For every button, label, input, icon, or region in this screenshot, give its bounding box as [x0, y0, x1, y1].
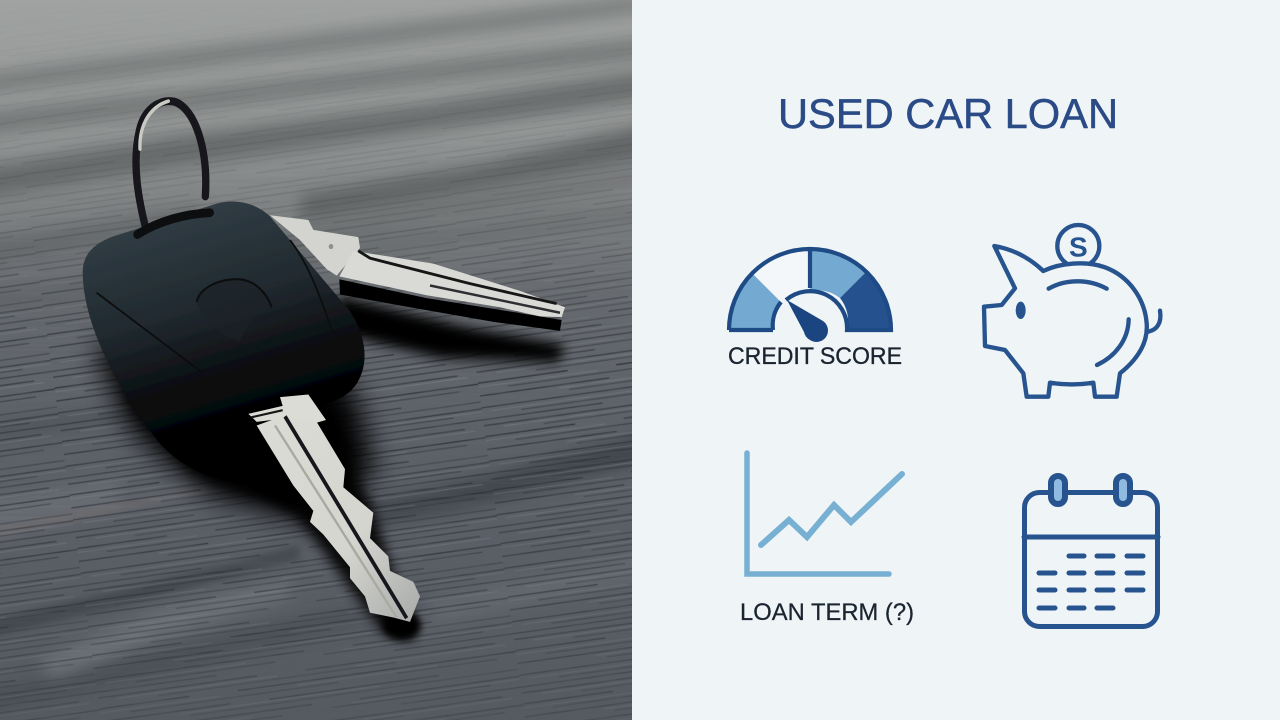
- icon: calendar: [1024, 476, 1158, 626]
- key shadows: [95, 295, 565, 640]
- coin: [1057, 225, 1099, 267]
- fob body: [83, 202, 365, 484]
- pig back curve: [1049, 281, 1107, 289]
- icon: key ring: [136, 101, 206, 235]
- icon: black key fob: [83, 202, 365, 484]
- icon: piggy bank with coin: [984, 225, 1160, 397]
- chart trend line: [761, 474, 902, 545]
- label: loan term: LOAN TERM (?): [740, 599, 914, 626]
- gauge left light-blue segment: [729, 273, 781, 330]
- wood grain lines: [0, 90, 632, 720]
- calendar frame: [1024, 492, 1158, 626]
- icon: lower fob key: [248, 395, 420, 622]
- pig belly curve: [1097, 319, 1129, 365]
- calendar left binding ring: [1051, 476, 1065, 504]
- label: credit score: CREDIT SCORE: [728, 343, 902, 370]
- fob button: [197, 279, 272, 342]
- calendar right binding ring: [1116, 476, 1130, 504]
- calendar header line: [1024, 534, 1158, 540]
- calendar date dashes: [1039, 556, 1143, 608]
- blade grooves: [358, 251, 557, 304]
- coin dollar sign: S: [1069, 232, 1088, 263]
- icon: upper house key: [270, 215, 565, 331]
- key head hole: [329, 244, 333, 249]
- blade groove: [285, 416, 407, 618]
- title: USED CAR LOAN: [778, 90, 1118, 137]
- panel: right background: [632, 0, 1280, 720]
- key head: [270, 215, 360, 276]
- fob seam: [97, 293, 200, 371]
- gauge needle: [787, 300, 828, 342]
- icon: line chart: [747, 453, 902, 574]
- gauge mid-blue segment: [810, 249, 866, 298]
- blurred wood streaks: [0, 0, 632, 720]
- gauge dark-blue segment: [840, 272, 891, 330]
- icon: credit score gauge: [729, 249, 891, 342]
- chart axes: [747, 453, 889, 574]
- pig tail: [1148, 311, 1160, 332]
- panel: photo of car keys on wooden table: [0, 0, 632, 720]
- wood table surface: [0, 0, 632, 720]
- pig eye: [1016, 302, 1026, 319]
- key blade: [339, 251, 565, 317]
- ring slot: [137, 213, 210, 235]
- gauge outline: [729, 249, 891, 330]
- gauge white segment: [752, 249, 810, 302]
- key shoulder: [248, 395, 326, 423]
- pig body: [984, 246, 1147, 397]
- key blade: [257, 416, 420, 622]
